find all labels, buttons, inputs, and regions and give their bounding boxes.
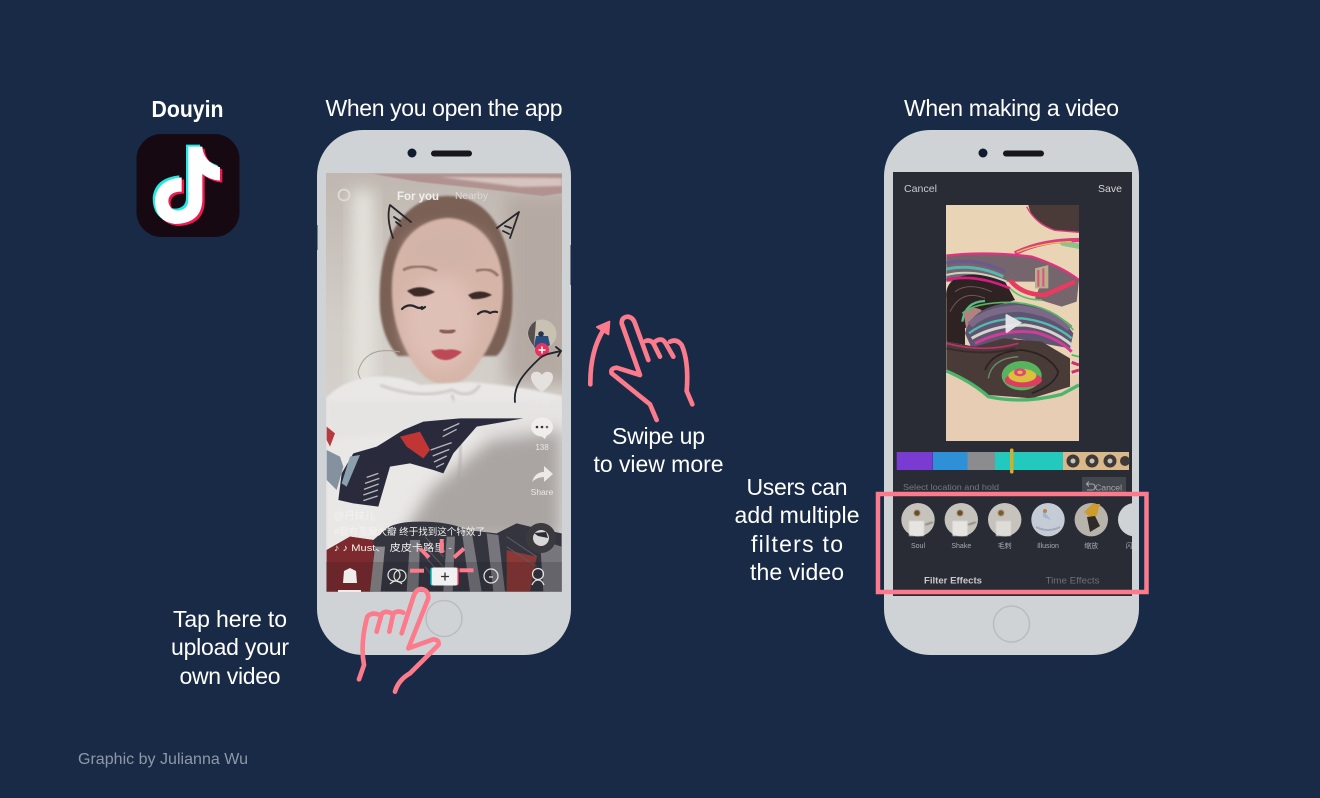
top right ear <box>1028 205 1079 232</box>
screen: selfie video <box>326 173 575 592</box>
highlight box <box>878 494 1146 592</box>
filter: partial: 闪 <box>1126 541 1132 550</box>
text: users can add multiple filters: the video <box>750 559 844 585</box>
video preview: headphones <box>946 205 1079 441</box>
icon: comments with count <box>531 418 553 452</box>
eyes <box>407 287 492 299</box>
icon: share: Share <box>531 487 554 497</box>
left cup <box>946 275 1015 345</box>
icon: heart with count <box>531 372 553 406</box>
lips <box>431 349 462 360</box>
Cancel: Cancel <box>904 183 937 195</box>
filter: 缩放 <box>1075 503 1108 550</box>
profile avatar <box>528 320 556 357</box>
filter: 毛刺 <box>988 503 1021 550</box>
text: swipe up second line: to view more <box>594 451 724 477</box>
filter timeline <box>897 448 1130 474</box>
text: users can add multiple filters: Users can <box>746 474 848 500</box>
filter: Illusion <box>1031 503 1065 550</box>
icon: share <box>531 466 554 497</box>
icon: swipe hand with arrow <box>590 317 692 420</box>
text: users can add multiple filters <box>734 474 860 585</box>
speaker <box>1003 150 1044 156</box>
tab: Filter Effects: Filter Effects <box>924 576 982 586</box>
face <box>392 218 503 384</box>
bottom nav icons <box>338 568 544 592</box>
caption: ♪ ♪ Must、 皮皮卡路里 - <box>334 542 452 554</box>
phone body <box>884 130 1139 655</box>
eyebrows <box>403 266 437 271</box>
tap burst lines <box>410 539 474 571</box>
heading: When making a video: When making a video <box>904 95 1119 121</box>
hair <box>380 196 512 356</box>
cat ears and whiskers <box>389 205 519 314</box>
scribble arrow <box>515 347 561 402</box>
icon: music disc <box>526 523 556 553</box>
panel: left phone <box>317 130 575 655</box>
filter thumbnails <box>901 503 1151 550</box>
upload plus button <box>430 568 459 586</box>
camera <box>408 148 416 158</box>
text: tap here to upload: Tap here to <box>173 606 287 632</box>
caption <box>334 510 485 554</box>
text: users can add multiple filters: add multiple <box>734 502 860 528</box>
Save: Save <box>1098 183 1122 195</box>
filter: Shake: Shake <box>951 543 971 550</box>
trousers <box>327 522 562 592</box>
filter: 毛刺: 毛刺 <box>998 541 1012 550</box>
phone body <box>317 130 571 655</box>
hair wisps <box>358 350 400 380</box>
filter: Illusion: Illusion <box>1037 543 1059 550</box>
filter: Soul <box>901 503 935 550</box>
right cup band <box>965 302 1073 348</box>
caption: @丹妹儿 <box>334 510 375 522</box>
credit: Graphic by Julianna Wu <box>78 751 248 768</box>
top nav: Nearby: Nearby <box>455 190 489 202</box>
hoodie pattern <box>327 418 523 507</box>
text: swipe up to view more: Swipe up <box>612 423 705 449</box>
play icon <box>1006 314 1022 333</box>
text: users can add multiple filters: filters to <box>751 531 843 557</box>
filter: 缩放: 缩放 <box>1084 541 1098 550</box>
screen <box>893 172 1132 596</box>
hint: select location and hold: Select location and hold <box>903 482 999 492</box>
phone 1 side buttons <box>317 225 571 285</box>
speaker <box>431 150 472 156</box>
nose <box>440 330 455 333</box>
hoodie <box>326 376 562 592</box>
text: tap here to upload <box>171 606 289 689</box>
text: tap here to upload: own video <box>180 663 280 689</box>
heading: When you open the app: When you open the app <box>326 95 562 121</box>
text: tap here to upload: upload your <box>171 634 289 660</box>
icon: comments with count: 138 <box>535 443 549 452</box>
filter: partial <box>1118 503 1132 549</box>
heading: Douyin: Douyin <box>152 96 224 122</box>
cancel button: Cancel <box>1095 482 1122 492</box>
right cup disc <box>946 338 1070 398</box>
filter: Shake <box>945 503 978 550</box>
headband <box>946 254 1079 307</box>
top nav: For you: For you <box>397 191 439 203</box>
icon: tap hand <box>359 589 439 692</box>
home button <box>994 606 1030 642</box>
caption: #我有恶魔大瓣 终于找到这个特效了 <box>334 526 485 538</box>
top nav: search icon <box>338 190 350 200</box>
panel: right phone <box>878 130 1151 655</box>
icon: Douyin app logo <box>136 134 240 237</box>
filter: Soul: Soul <box>911 543 925 550</box>
cancel button <box>1082 477 1126 493</box>
home button <box>426 600 462 636</box>
icon: heart with count: 2.2k <box>534 397 551 406</box>
tab: Time Effects: Time Effects <box>1046 576 1100 586</box>
camera <box>978 148 988 158</box>
